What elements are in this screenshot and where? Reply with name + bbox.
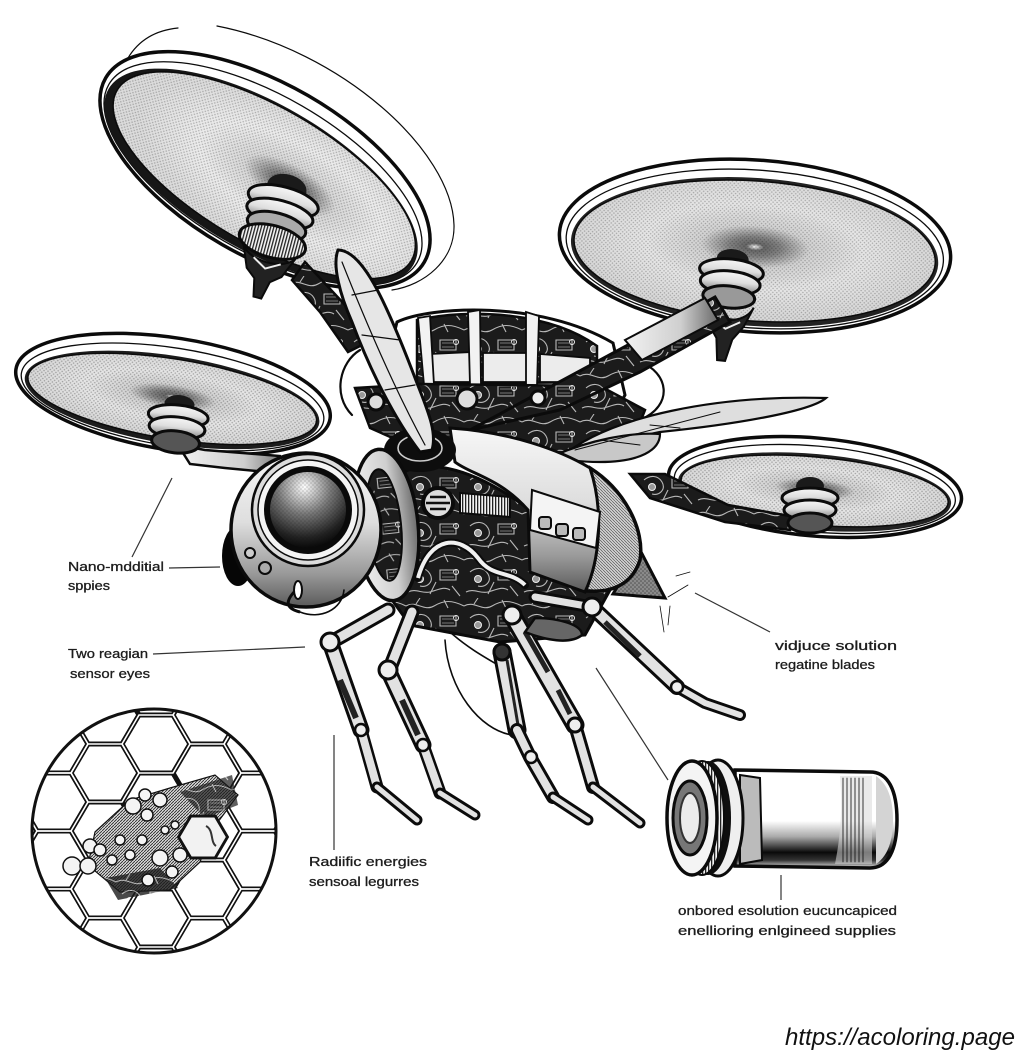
tail spray marks [660,572,690,632]
label: encapsulated supplies: onbored esolution eucuncapiced [678,903,897,918]
rotor: mid right [630,425,966,549]
dome lower machinery [355,384,645,470]
abdomen [565,468,641,591]
dome shell [370,310,625,450]
front wing [336,250,434,452]
leg 3 [445,632,588,820]
control panel [530,490,600,548]
gear drum [460,493,510,517]
lens element [673,781,707,855]
leg 1 [321,610,417,820]
magnified honeycomb lens [30,708,278,954]
dense pollen centre [88,775,238,892]
rotor disc [553,147,957,345]
rotor arm [292,262,362,352]
glossy cell [179,816,227,858]
threaded section [835,776,872,864]
rotor disc [664,425,966,549]
dome window band [417,314,597,384]
tail cone [613,550,665,598]
capsule body [735,770,897,868]
upper plate [450,428,599,592]
rotor motor [145,392,210,456]
wing socket [384,428,456,472]
honeycomb cells [34,711,274,951]
cap face [667,761,717,875]
lower body pod [525,618,582,641]
knurled cap [680,761,724,875]
head details [259,562,271,574]
label: sensor eyes [68,646,305,681]
label: solution blades [695,593,897,672]
rotor disc [63,4,467,336]
lens rim [32,709,276,953]
eye ring [252,454,364,566]
capsule end shading [876,776,893,864]
inner sleeve [740,775,762,864]
capsule [667,760,897,876]
rotor motor [690,246,766,364]
rotor disc [7,314,339,474]
head with sensor eye [222,453,381,615]
label: sensor legs [309,735,428,889]
rotor: top left [63,4,467,352]
label: encapsulated supplies: enellioring enlgineed supplies [678,923,897,938]
label: sensor legs: sensoal legurres [309,874,420,889]
label: sensor eyes: sensor eyes [70,666,151,681]
dome panels [430,352,590,382]
sensor eye [264,466,352,554]
right arm to top rotor [470,297,730,430]
leg 2 [379,612,475,815]
pollen spheres [63,789,194,886]
watermark url: https://acoloring.page [785,1024,1015,1051]
label: sensor legs: Radiific energies [309,854,428,869]
label: nano medicine supplies: Nano-mdditial [68,559,164,574]
rotor: mid left [7,314,339,474]
label: sensor eyes: Two reagian [68,646,148,661]
lower machinery mass [385,467,610,642]
rotor: top right [553,147,957,364]
rotor arm [630,474,790,530]
label: nano medicine supplies: sppies [68,578,111,593]
label: solution blades: regatine blades [775,657,876,672]
side loops [340,350,664,420]
rear shadow [222,526,254,586]
rotor motor [782,477,838,533]
legs [321,597,740,823]
body tubes [418,543,525,585]
leg 5 [535,597,740,715]
bee body [384,428,665,642]
leg 4 [503,606,640,823]
rotor arm [178,445,288,474]
head shell [231,453,381,607]
dome housing [340,310,664,470]
right wings [553,398,826,462]
label: nano medicine supplies [68,478,220,593]
neck collar [346,446,426,604]
label: solution blades: vidjuce solution [775,638,897,653]
rotation trail arc [128,26,454,290]
capsule pointer line [596,668,668,780]
dome ribs [418,310,539,386]
rotor motor [223,166,325,307]
label: encapsulated supplies [678,875,897,938]
collar [693,760,743,876]
